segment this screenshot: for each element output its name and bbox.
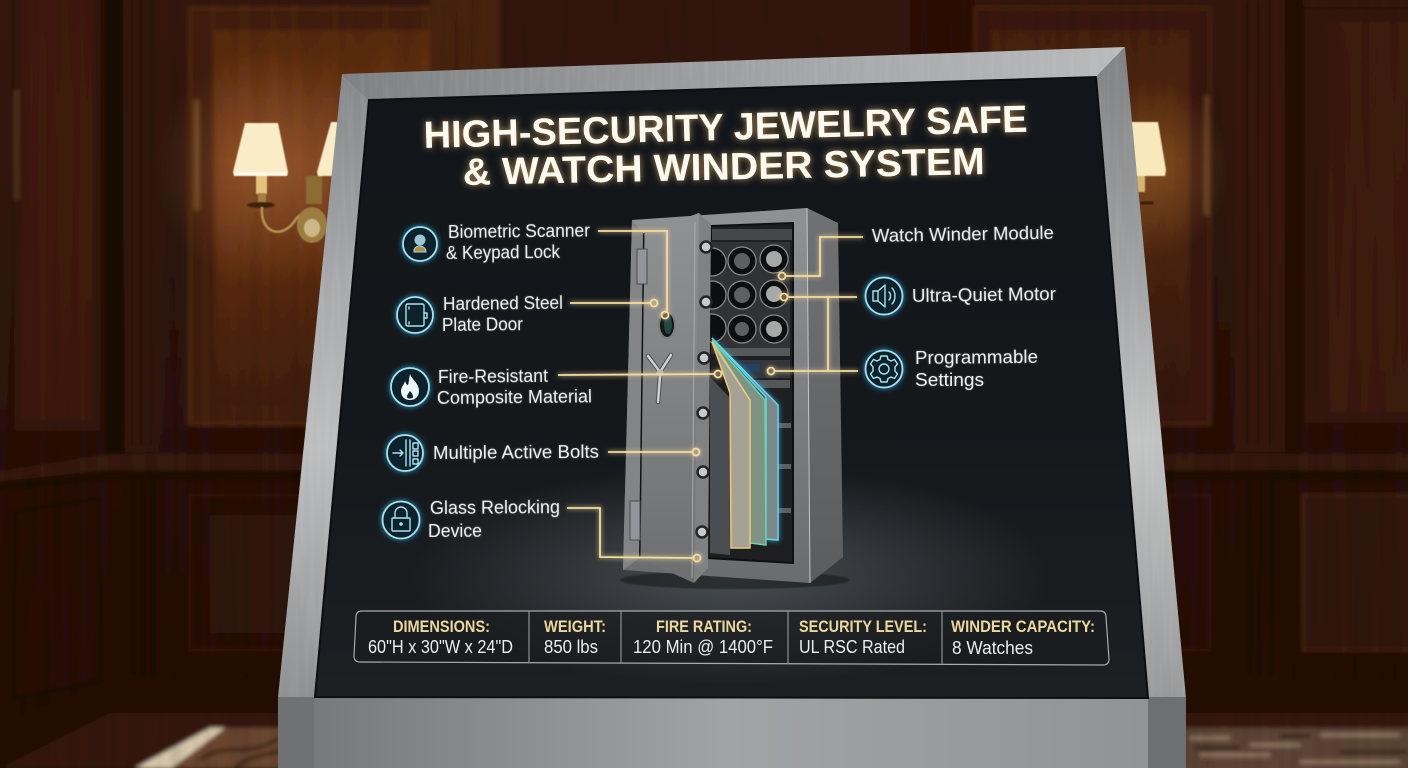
callout: biometric scanner <box>598 231 668 318</box>
icon: speaker <box>866 278 902 314</box>
label: hardened steel door: Plate Door <box>442 314 523 335</box>
label: fire-resistant: Fire-Resistant <box>438 366 548 387</box>
keypad lock <box>659 312 675 338</box>
stand base <box>278 697 1186 768</box>
callout: relocking device <box>567 508 700 562</box>
sign frame <box>278 47 1186 768</box>
left wall panel <box>13 0 159 455</box>
label: hardened steel door: Hardened Steel <box>443 293 563 314</box>
spec: fire rating: 120 Min @ 1400°F <box>633 637 773 657</box>
label: biometric scanner: Biometric Scanner <box>448 221 590 242</box>
callout lines <box>558 231 863 562</box>
right wall sconce <box>1070 80 1230 260</box>
safe door <box>623 213 711 583</box>
spec: weight <box>544 618 606 657</box>
carpet <box>135 728 1408 768</box>
label: fire-resistant: Composite Material <box>437 386 592 408</box>
spec: fire rating <box>633 618 773 657</box>
winder backplate <box>711 242 790 354</box>
top center panelling <box>430 0 1210 424</box>
spec table frame <box>354 611 1109 665</box>
spec: weight: WEIGHT: <box>544 618 606 636</box>
label: programmable settings: Programmable <box>915 347 1038 368</box>
wainscot lower panels <box>15 480 1408 698</box>
safe side wall <box>807 208 843 583</box>
label: biometric scanner: & Keypad Lock <box>446 242 561 263</box>
spec: dimensions <box>368 618 513 657</box>
frame: right bar <box>1096 47 1186 698</box>
safe shelves <box>720 348 791 513</box>
icon: fire <box>391 368 429 406</box>
sign board <box>315 77 1148 698</box>
label: active bolts: Multiple Active Bolts <box>433 442 599 463</box>
icon: active bolts <box>387 435 423 471</box>
frame: left bar <box>278 74 369 697</box>
callout: ultra-quiet motor <box>780 294 857 300</box>
right pilaster and panel <box>1235 0 1408 455</box>
spec: fire rating: FIRE RATING: <box>656 618 752 636</box>
label: glass relocking device: Glass Relocking <box>430 497 560 518</box>
callout: programmable settings <box>768 297 858 374</box>
watch winders grid <box>698 245 788 343</box>
baseboard and floor <box>0 680 1408 768</box>
label: fire-resistant <box>437 366 592 408</box>
safe illustration <box>620 208 850 589</box>
safe front body <box>623 208 810 583</box>
title: & WATCH WINDER SYSTEM <box>462 141 985 194</box>
upper paneling near lamps <box>190 8 430 424</box>
label: programmable settings <box>915 347 1038 390</box>
callout: active bolts <box>608 448 700 456</box>
label: biometric scanner <box>446 221 590 263</box>
callout: fire-resistant material <box>558 370 722 378</box>
spec: security level: SECURITY LEVEL: <box>799 618 927 636</box>
spec: security level <box>799 618 927 657</box>
label: glass relocking device <box>428 497 560 541</box>
door handle <box>648 355 671 402</box>
frame: top bar <box>342 47 1125 100</box>
icon: gear <box>866 350 902 388</box>
spec: winder capacity: 8 Watches <box>952 638 1033 658</box>
label: hardened steel door <box>442 293 563 335</box>
spec: dimensions: 60"H x 30"W x 24"D <box>368 637 513 657</box>
spec table <box>354 611 1109 665</box>
title <box>423 99 1028 194</box>
icon: biometric scanner <box>403 227 437 261</box>
label: programmable settings: Settings <box>915 370 984 390</box>
composite layers <box>710 338 778 555</box>
spec: weight: 850 lbs <box>544 637 598 657</box>
callout: watch winder module <box>778 237 863 280</box>
label: watch winder module: Watch Winder Module <box>872 223 1054 246</box>
spec: winder capacity <box>951 618 1095 658</box>
door bolts <box>696 242 712 538</box>
icon: steel door <box>397 297 433 333</box>
label: ultra-quiet motor: Ultra-Quiet Motor <box>912 284 1056 306</box>
spec: winder capacity: WINDER CAPACITY: <box>951 618 1095 636</box>
label: glass relocking device: Device <box>428 521 482 541</box>
spec: security level: UL RSC Rated <box>799 637 905 657</box>
icon: padlock <box>382 502 420 538</box>
left wall sconce <box>155 50 395 290</box>
hinges <box>630 249 647 540</box>
spec: dimensions: DIMENSIONS: <box>393 618 490 636</box>
chair rail <box>0 454 1408 492</box>
title: HIGH-SECURITY JEWELRY SAFE <box>423 99 1028 157</box>
callout: hardened steel door <box>570 300 658 306</box>
safe interior <box>708 223 793 563</box>
safe floor shadow <box>620 571 850 589</box>
